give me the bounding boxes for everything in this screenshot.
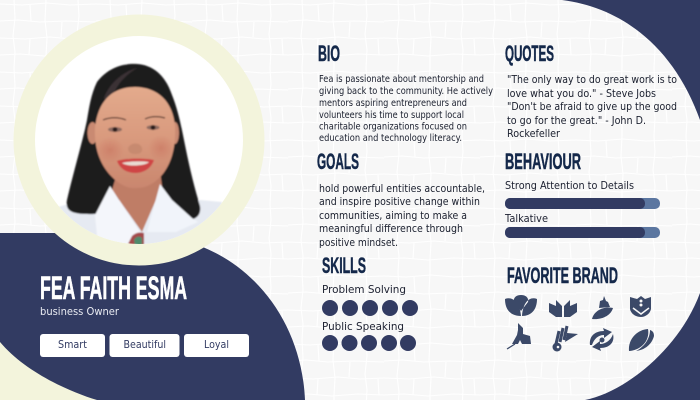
behaviour bar: Strong Attention to Details xyxy=(505,180,660,209)
goals heading: GOALS xyxy=(317,149,359,174)
goals text xyxy=(319,182,485,249)
tag: Loyal xyxy=(184,334,249,357)
job title: business Owner xyxy=(40,306,120,318)
tag: Beautiful: Beautiful xyxy=(124,340,166,351)
goals text: positive mindset. xyxy=(319,236,398,249)
bio heading: BIO xyxy=(318,41,340,66)
quotes section xyxy=(505,41,677,140)
navy profile panel xyxy=(0,233,305,400)
goals text: and inspire positive change within xyxy=(319,195,480,208)
behaviour heading: BEHAVIOUR xyxy=(505,149,581,174)
bio text xyxy=(319,74,493,144)
quotes text: "The only way to do great work is to xyxy=(507,73,677,86)
favorite brand heading: FAVORITE BRAND xyxy=(507,263,618,288)
name heading: FEA FAITH ESMA xyxy=(40,270,187,306)
bio text: giving back to the community. He actively xyxy=(319,86,493,97)
goals text: communities, aiming to make a xyxy=(319,209,467,222)
brand icons xyxy=(505,295,654,352)
navy corner bottom-right xyxy=(585,293,700,400)
quotes text: to go for the great." - John D. xyxy=(507,114,646,127)
tag: Smart: Smart xyxy=(58,340,87,351)
tag: Loyal: Loyal xyxy=(204,340,229,351)
goals text: hold powerful entities accountable, xyxy=(319,182,485,195)
behaviour bar: Talkative: Talkative xyxy=(504,213,548,225)
skills heading: SKILLS xyxy=(322,253,366,278)
bio text: mentors aspiring entrepreneurs and xyxy=(319,98,467,109)
icon: open book xyxy=(549,300,577,317)
quotes text: "Don't be afraid to give up the good xyxy=(507,100,677,113)
quotes text: love what you do." - Steve Jobs xyxy=(507,87,656,100)
bio text: charitable organizations focused on xyxy=(319,122,467,132)
bio text: Fea is passionate about mentorship and xyxy=(319,74,484,85)
skill: Public Speaking: Public Speaking xyxy=(322,321,404,333)
quotes text: Rockefeller xyxy=(507,127,560,140)
trait tags xyxy=(40,334,249,357)
bio text: education and technology literacy. xyxy=(319,133,462,144)
portrait photo xyxy=(58,64,222,250)
goals text: meaningful difference through xyxy=(319,222,463,235)
behaviour section xyxy=(504,149,660,238)
skill: Problem Solving: Problem Solving xyxy=(322,284,406,296)
behaviour bar: Talkative xyxy=(504,213,660,238)
cream shape bottom-left xyxy=(0,330,110,400)
favorite brand section xyxy=(505,263,654,352)
navy corner top-right xyxy=(562,0,700,120)
profile photo ring xyxy=(14,14,264,266)
icon: recycle arrows xyxy=(590,328,613,351)
quotes heading: QUOTES xyxy=(505,41,554,66)
tag: Smart xyxy=(40,334,105,357)
icon: tower leaf xyxy=(507,323,531,349)
quotes text xyxy=(507,73,677,140)
bio text: volunteers his time to support local xyxy=(319,110,464,121)
behaviour bar: Strong Attention to Details: Strong Attention to Details xyxy=(505,180,634,192)
icon: tower wing xyxy=(552,326,578,352)
bio section xyxy=(318,41,493,144)
tag: Beautiful xyxy=(110,334,180,357)
icon: leaf ball xyxy=(629,329,654,351)
skills section xyxy=(322,253,418,351)
icon: shield xyxy=(630,296,651,317)
icon: leaf lotus xyxy=(505,295,537,316)
icon: ship leaf xyxy=(592,296,613,319)
goals section xyxy=(317,149,485,249)
